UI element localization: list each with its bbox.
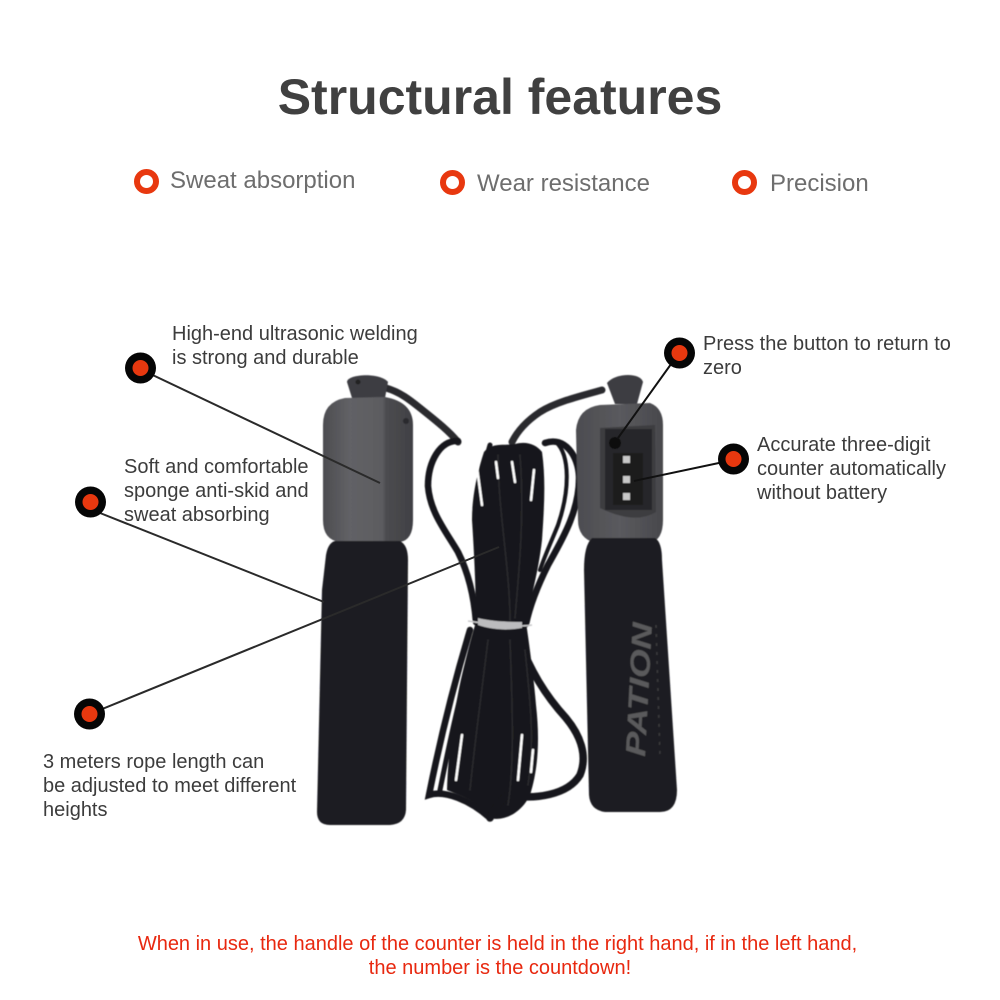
callout: sponge grip: Soft and comfortable [124,456,309,478]
callout: rope length: be adjusted to meet different [43,775,297,797]
product: jump rope [317,375,677,825]
foam grip with logo [584,538,677,812]
highlights [470,455,531,805]
callout: rope length: heights [43,799,108,821]
gaps between strands [456,460,534,780]
foam grip [317,541,408,825]
warning note: the number is the countdown! [369,957,631,979]
callout: rope length [43,547,499,821]
callout: ultrasonic welding: is strong and durable [172,347,359,369]
rope coil [386,388,602,819]
warning note [138,933,857,979]
callout: reset button: zero [703,357,742,379]
feature: wear resistance: Wear resistance [477,170,650,197]
callout: rope length: 3 meters rope length can [43,751,264,773]
feature: precision: Precision [770,170,869,197]
callout: three-digit counter: counter automatically [757,458,946,480]
warning note: When in use, the handle of the counter is held in the right hand, if in the left hand, [138,933,857,955]
callout: ultrasonic welding [125,323,418,483]
right handle: PATION [620,621,658,757]
counter window [600,425,656,518]
central rope mass [447,443,544,819]
callout: sponge grip: sponge anti-skid and [124,480,309,502]
callout: ultrasonic welding: High-end ultrasonic welding [172,323,418,345]
callout: sponge grip: sweat absorbing [124,504,270,526]
band [468,621,532,626]
feature: sweat absorption: Sweat absorption [170,167,355,194]
callout: three-digit counter: without battery [756,482,887,504]
callout: reset button: Press the button to return to [703,333,951,355]
callout: three-digit counter [634,434,946,504]
callout: sponge grip [75,456,324,602]
title: Structural features [278,69,722,125]
left handle [317,375,413,825]
callout: three-digit counter: Accurate three-digit [757,434,931,456]
right handle [576,375,677,812]
callout: reset button [618,333,951,438]
outer loops [428,441,476,622]
